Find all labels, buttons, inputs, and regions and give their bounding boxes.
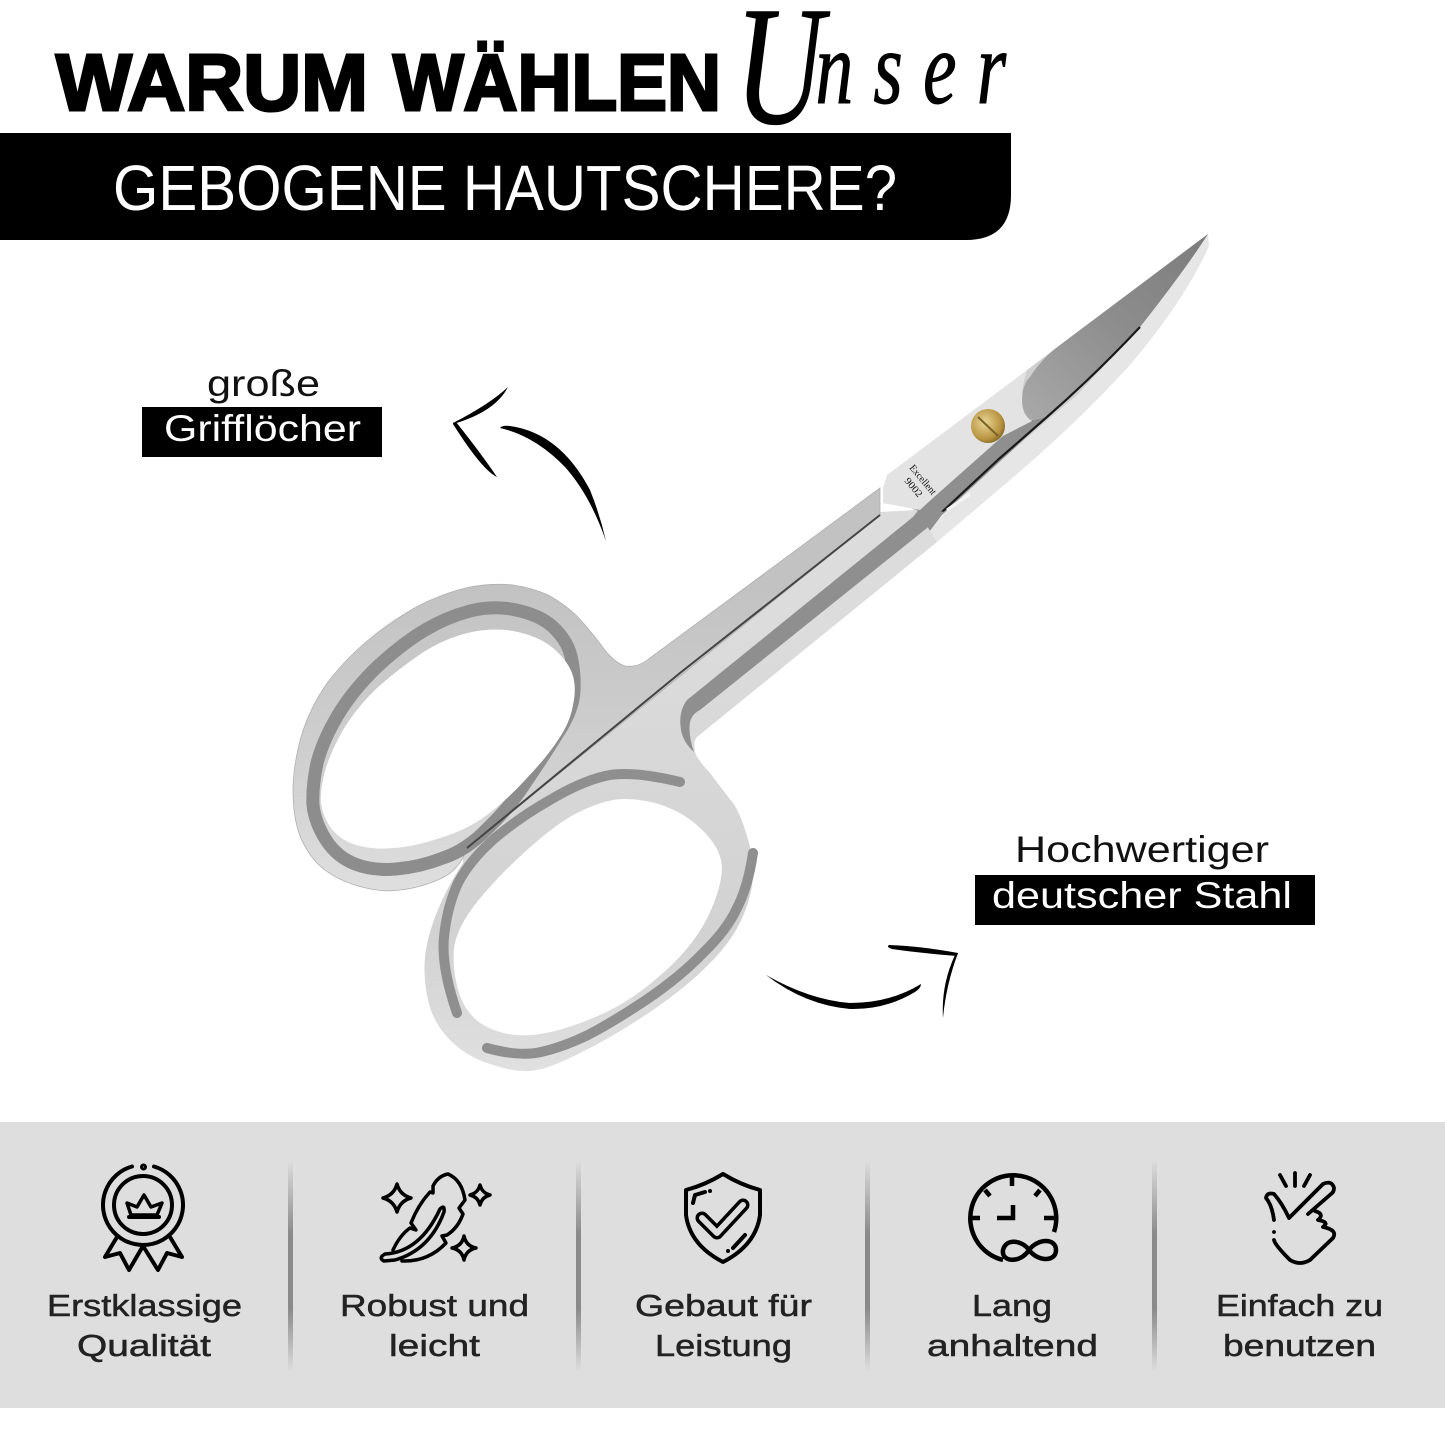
caption: Robust und leicht bbox=[340, 1288, 529, 1363]
banner heading: GEBOGENE HAUTSCHERE? bbox=[113, 152, 897, 224]
callout: große Grifflöcher bbox=[142, 363, 382, 457]
icon: shield with check bbox=[686, 1174, 760, 1262]
caption: Erstklassige Qualität: Qualität bbox=[77, 1328, 211, 1363]
caption: Lang anhaltend bbox=[927, 1288, 1098, 1363]
callout: Hochwertiger deutscher Stahl bbox=[975, 829, 1315, 925]
blade bbox=[883, 234, 1209, 542]
benefits panel bbox=[0, 1122, 1445, 1408]
engraving: Excellent 9002: Excellent bbox=[907, 463, 938, 498]
caption: Gebaut für Leistung bbox=[635, 1288, 812, 1363]
icon: award badge bbox=[103, 1166, 183, 1270]
icon: snapping hand bbox=[1266, 1173, 1334, 1263]
callout: Hochwertiger deutscher Stahl: Hochwertiger bbox=[1015, 829, 1269, 870]
brass screw bbox=[971, 409, 1005, 443]
caption: Einfach zu benutzen: Einfach zu bbox=[1216, 1288, 1383, 1323]
caption: Einfach zu benutzen bbox=[1216, 1288, 1383, 1363]
arrow: to handle holes bbox=[453, 387, 606, 541]
upper handle ring bbox=[293, 488, 880, 891]
callout: große Grifflöcher: große bbox=[207, 363, 320, 404]
headline: Warum wählen bbox=[56, 38, 721, 127]
caption: Gebaut für Leistung: Leistung bbox=[655, 1328, 792, 1363]
caption: Lang anhaltend: Lang bbox=[972, 1288, 1052, 1323]
lower handle ring bbox=[424, 508, 945, 1071]
caption: Gebaut für Leistung: Gebaut für bbox=[635, 1288, 812, 1323]
pivot plate bbox=[883, 370, 1032, 510]
callout: Hochwertiger deutscher Stahl: deutscher Stahl bbox=[992, 875, 1292, 916]
script word: Unser: nser bbox=[815, 9, 1026, 126]
caption: Lang anhaltend: anhaltend bbox=[927, 1328, 1098, 1363]
caption: Erstklassige Qualität: Erstklassige bbox=[47, 1288, 242, 1323]
caption: Einfach zu benutzen: benutzen bbox=[1223, 1328, 1376, 1363]
caption: Robust und leicht: leicht bbox=[389, 1328, 480, 1363]
caption: Robust und leicht: Robust und bbox=[340, 1288, 529, 1323]
black banner bbox=[0, 133, 1011, 240]
scissors illustration bbox=[293, 234, 1209, 1071]
caption: Erstklassige Qualität bbox=[47, 1288, 242, 1363]
callout: große Grifflöcher: Grifflöcher bbox=[164, 408, 361, 449]
icon: clock with infinity bbox=[970, 1175, 1056, 1260]
headline: Warum wählen: WÄHLEN bbox=[393, 38, 721, 127]
arrow: to steel bbox=[766, 945, 958, 1018]
icon: feather with sparkles bbox=[381, 1174, 490, 1261]
headline: Warum wählen: WARUM bbox=[56, 38, 368, 127]
engraving: Excellent 9002: 9002 bbox=[902, 476, 924, 500]
